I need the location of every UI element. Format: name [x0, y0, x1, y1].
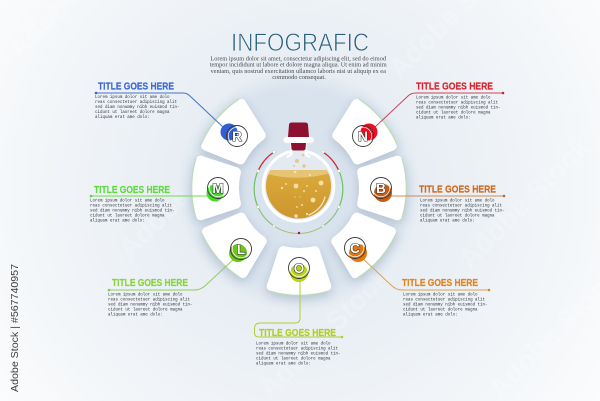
connector: O: [254, 280, 342, 337]
callout: L: reas consectetuer adipiscing alit: [108, 298, 191, 302]
badge: N: N: [358, 129, 368, 144]
intro paragraph: commodo consequat.: [272, 74, 326, 81]
callout: O: sed diam nonummy nibh euismod tin-: [256, 352, 340, 356]
callout: R: TITLE GOES HERE: [98, 82, 174, 92]
intro paragraph: Lorem ipsum dolor sit amet, consectetur adipiscing elit, sed do eimod: [210, 56, 387, 62]
badge: R: [220, 124, 248, 146]
callout: B: aliquam erat ame dolo:: [420, 218, 475, 224]
callout: O: Lorem ipsum dolor sit ame dolo: [256, 342, 331, 346]
stock id vertical label: Adobe Stock | #567740957: [9, 264, 21, 392]
badge: R: R: [232, 129, 242, 144]
callout: C: reas consectetuer adipiscing alit: [403, 298, 486, 302]
callout: N: aliquam erat ame dolo:: [416, 116, 471, 120]
cork: [288, 122, 309, 137]
badge: N: [352, 124, 378, 146]
callout: O: TITLE GOES HERE: [259, 328, 336, 339]
badge: C: [344, 238, 367, 262]
callout: M: cidunt ut laoreet dolore magna: [90, 214, 165, 218]
callout: R: [95, 82, 179, 120]
callout: B: Lorem ipsum dolor sit ame dolo: [420, 198, 495, 204]
ring of seven segments: [192, 96, 406, 295]
badge: O: O: [294, 261, 304, 276]
callout: L: cidunt ut laoreet dolore magna: [108, 308, 183, 312]
callout: M: reas consectetuer adipiscing alit: [90, 204, 173, 208]
connector: B: [386, 195, 504, 197]
callout: N: TITLE GOES HERE: [416, 82, 493, 92]
callout: N: [416, 82, 504, 120]
badge: L: L: [237, 242, 245, 257]
connector: C: [361, 257, 489, 290]
connector: M: [91, 195, 212, 197]
callout: L: TITLE GOES HERE: [112, 278, 188, 289]
callout: O: [256, 328, 343, 366]
callout: M: TITLE GOES HERE: [94, 185, 170, 196]
callout: C: sed diam nonummy nibh euismod tin-: [403, 302, 487, 308]
callout: L: [108, 278, 192, 318]
callout: N: cidunt ut laoreet dolore magna: [416, 110, 491, 116]
callout: C: cidunt ut laoreet dolore magna: [403, 308, 478, 312]
callout: L: sed diam nonummy nibh euismod tin-: [108, 302, 192, 308]
connector: R: [96, 93, 224, 128]
callout: N: sed diam nonummy nibh euismod tin-: [416, 106, 500, 110]
callout: B: TITLE GOES HERE: [419, 184, 496, 196]
callout: M: Lorem ipsum dolor sit ame dolo: [90, 198, 165, 204]
callout: C: Lorem ipsum dolor sit ame dolo: [403, 292, 478, 298]
callout: N: reas consectetuer adipiscing alit: [416, 100, 499, 106]
callout: R: sed diam nonummy nibh euismod tin-: [95, 105, 179, 110]
infographic canvas: [10, 24, 506, 392]
badge: B: [370, 178, 392, 202]
intro paragraph: veniam, quis nostrud exercitation ullamco laboris nisi ut aliquip ex ea: [211, 68, 386, 75]
callout: N: Lorem ipsum dolor sit ame dolo: [416, 96, 491, 100]
callout: O: aliquam erat ame dolo:: [256, 362, 311, 366]
callout: B: [419, 184, 505, 224]
callout: L: Lorem ipsum dolor sit ame dolo: [108, 292, 183, 298]
callout: M: aliquam erat ame dolo:: [90, 218, 145, 224]
callout: C: [402, 278, 490, 318]
title: INFOGRAFIC: [231, 29, 369, 57]
callout: O: reas consectetuer adipiscing alit: [256, 346, 339, 352]
badge: L: [229, 238, 252, 262]
icon: flask: [263, 122, 334, 222]
badge: B: B: [376, 181, 386, 196]
progress arcs around flask: [254, 151, 343, 234]
watermark: Adobe Stock: [112, 121, 256, 264]
connector: L: [109, 257, 236, 290]
watermark: Adobe Stock: [252, 261, 396, 401]
callout: M: sed diam nonummy nibh euismod tin-: [90, 208, 174, 214]
callout: B: sed diam nonummy nibh euismod tin-: [420, 208, 504, 214]
intro paragraph: tempor incididunt ut labore et dolore magna aliqua. Ut enim ad minim: [210, 62, 387, 69]
central disc: [177, 68, 421, 312]
badge: M: [206, 178, 228, 202]
callout: M: [90, 185, 174, 224]
badge: C: C: [350, 241, 360, 256]
badge: M: M: [212, 181, 224, 196]
callout: L: aliquam erat ame dolo:: [108, 312, 163, 318]
connector: N: [374, 93, 503, 128]
callout: O: cidunt ut laoreet dolore magna: [256, 356, 331, 362]
callout: R: cidunt ut laoreet dolore magna: [95, 110, 170, 115]
callout: B: cidunt ut laoreet dolore magna: [420, 214, 495, 218]
callout: C: TITLE GOES HERE: [402, 278, 478, 289]
callout: C: aliquam erat ame dolo:: [403, 312, 458, 318]
callout: R: aliquam erat ame dolo:: [95, 115, 150, 120]
badge: O: [288, 258, 310, 282]
callout: R: Lorem ipsum dolor sit ame dolo: [95, 95, 170, 100]
callout: R: reas consectetuer adipiscing alit: [95, 100, 178, 105]
callout: B: reas consectetuer adipiscing alit: [420, 204, 503, 208]
watermark: Adobe Stock: [452, 131, 596, 274]
